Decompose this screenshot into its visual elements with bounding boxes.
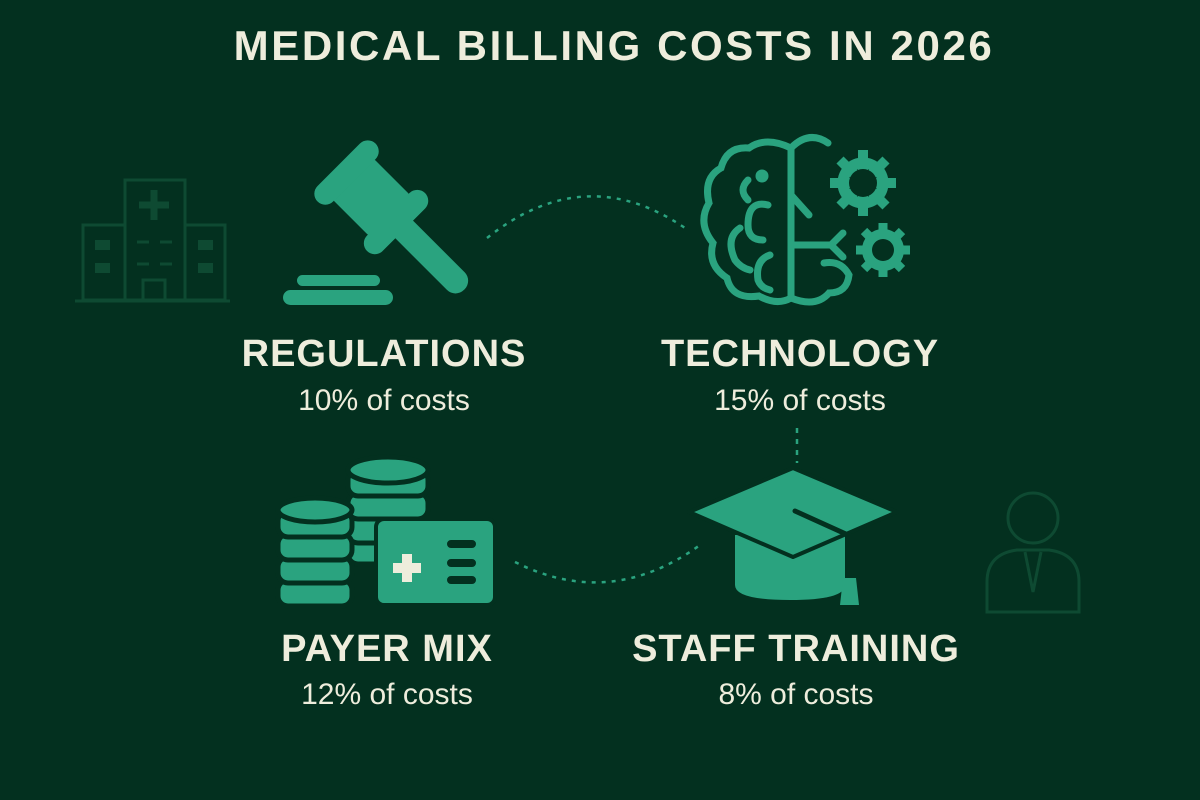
icon: gavel bbox=[283, 136, 493, 319]
icon: graduation cap bbox=[689, 468, 897, 605]
heading: payer mix: PAYER MIX bbox=[281, 628, 493, 670]
icon: faint person bbox=[987, 493, 1079, 612]
arrow: dotted arc top bbox=[487, 196, 685, 238]
heading: staff training: STAFF TRAINING bbox=[632, 628, 960, 670]
heading: technology: 15% of costs bbox=[714, 384, 886, 417]
heading: regulations bbox=[242, 333, 526, 417]
arrow: vertical dashes bbox=[796, 428, 798, 463]
heading: staff training: 8% of costs bbox=[718, 678, 874, 711]
heading: payer mix bbox=[281, 628, 493, 711]
arrow: dotted arc bottom bbox=[515, 545, 700, 582]
heading: payer mix: 12% of costs bbox=[301, 678, 473, 711]
icon: coins and card bbox=[278, 457, 495, 606]
heading: regulations: REGULATIONS bbox=[242, 333, 526, 375]
heading: technology bbox=[661, 333, 939, 417]
heading: regulations: 10% of costs bbox=[298, 384, 470, 417]
title: MEDICAL BILLING COSTS IN 2026 bbox=[234, 22, 994, 69]
icon: faint hospital bbox=[75, 180, 230, 301]
heading: technology: TECHNOLOGY bbox=[661, 333, 939, 375]
icon: brain with gears bbox=[704, 138, 910, 302]
heading: staff training bbox=[632, 628, 960, 711]
